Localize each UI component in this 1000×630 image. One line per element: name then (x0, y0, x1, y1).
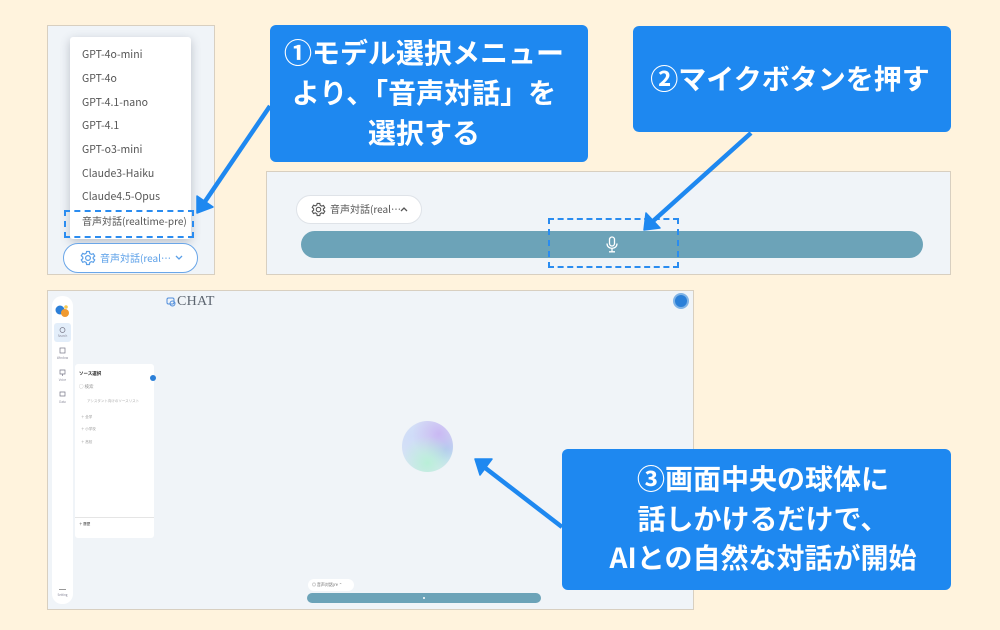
source list: アシスタント向けのソースリスト (87, 399, 139, 404)
callout 1: select voice chat (270, 25, 588, 162)
dropdown menu: Claude3-Haiku (82, 166, 154, 181)
sidebar navigation (52, 296, 73, 604)
mini model selector (308, 579, 354, 591)
callout 3: talk to the orb: 話しかけるだけで、 (638, 498, 888, 538)
panel: model selection menu screenshot (47, 25, 215, 275)
panel: microphone button screenshot (266, 171, 951, 275)
nav labels: Search (58, 334, 67, 338)
voice orb (402, 421, 453, 472)
footer row (75, 517, 154, 527)
footer row: ＋ 履歴 (79, 522, 90, 527)
nav icons (60, 327, 66, 396)
dropdown menu: GPT-o3-mini (82, 142, 142, 157)
callout 1: select voice chat: より、「音声対話」を (292, 72, 556, 112)
voice input bar (301, 231, 923, 258)
panel title: ソース選択 (79, 371, 101, 377)
dropdown menu: GPT-4.1-nano (82, 95, 148, 110)
search row: ○ 検索 (79, 384, 94, 390)
settings nav marker (59, 589, 66, 590)
badge (150, 375, 156, 381)
dashed highlight: voice chat item (64, 210, 194, 238)
dropdown menu: 音声対話(realtime-pre) (82, 213, 187, 228)
list item: 全学: ＋ 全学 (81, 415, 92, 420)
nav labels: Data (59, 400, 66, 404)
model selector button (63, 243, 198, 273)
mini model selector: ◎ 音声対話(re ⌃ (312, 582, 342, 588)
nav labels: Window (57, 356, 68, 360)
nav labels: Voice (59, 378, 66, 382)
heading: CHAT logo: CHAT (177, 294, 215, 309)
dropdown menu: GPT-4o (82, 71, 117, 86)
callout 3: talk to the orb: AIとの自然な対話が開始 (610, 537, 916, 577)
mini microphone dot (423, 597, 425, 599)
icon: microphone (606, 236, 618, 252)
nav labels (57, 334, 68, 597)
callout 1: select voice chat: ①モデル選択メニュー (284, 32, 564, 72)
callout 2: press mic button (633, 26, 951, 132)
panel: source selection (75, 364, 154, 538)
arrow: to microphone button (644, 133, 751, 230)
mini voice input bar (307, 593, 541, 603)
arrow: to orb (475, 459, 562, 527)
callout 2: press mic button: ②マイクボタンを押す (650, 58, 930, 98)
dropdown menu (70, 37, 191, 239)
callout 1: select voice chat: 選択する (368, 112, 480, 152)
active nav item (54, 323, 71, 342)
dashed highlight: microphone button (548, 218, 679, 268)
nav labels: Setting (58, 593, 67, 597)
arrow: to voice chat item (197, 106, 270, 213)
list item: 小学校: ＋ 小学校 (81, 427, 96, 432)
icon: top-right circle button (673, 293, 689, 309)
model selector pill (296, 195, 422, 224)
icon: app logo (56, 305, 69, 317)
panel: voice chat screen screenshot (47, 290, 694, 610)
model selector button: 音声対話(real… (100, 250, 171, 265)
dropdown menu: GPT-4.1 (82, 118, 119, 133)
dropdown menu: GPT-4o-mini (82, 47, 142, 62)
dropdown menu: Claude4.5-Opus (82, 189, 160, 204)
callout 3: talk to the orb (562, 449, 951, 590)
model selector pill: 音声対話(real… (330, 201, 401, 216)
list item: 高校: ＋ 高校 (81, 440, 92, 445)
callout 3: talk to the orb: ③画面中央の球体に (637, 458, 889, 498)
